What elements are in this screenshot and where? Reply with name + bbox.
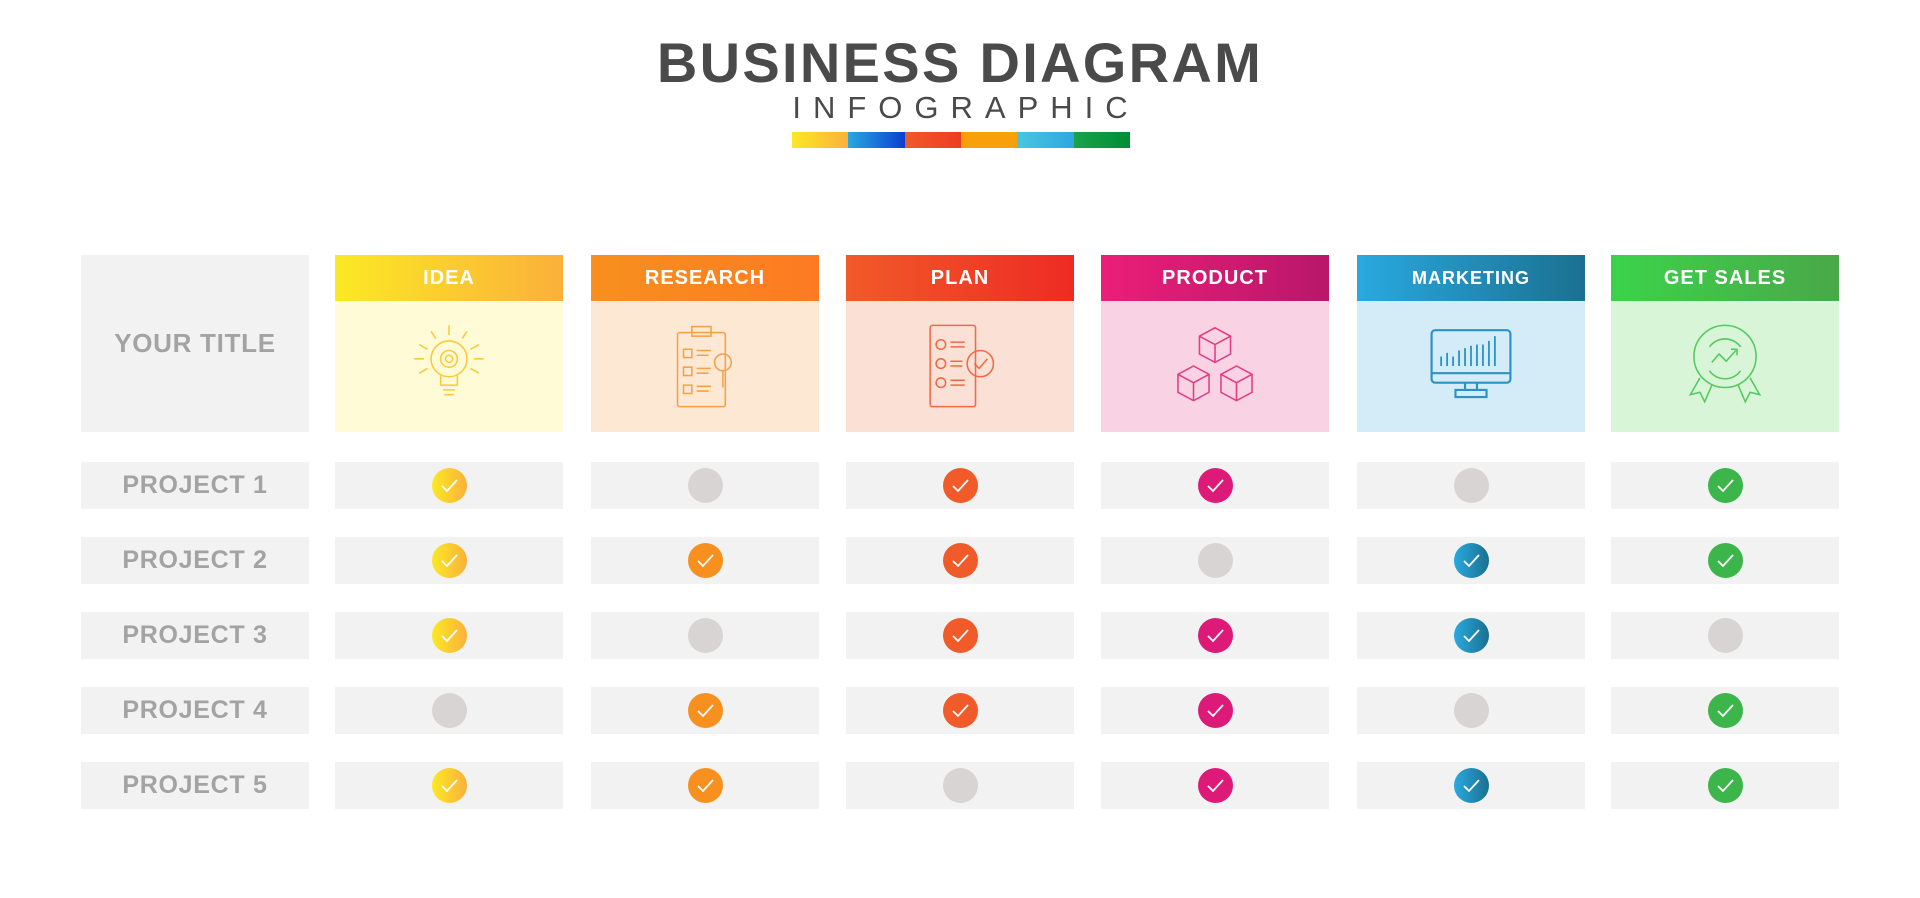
panel: idea: IDEA [423, 267, 475, 289]
title: BUSINESS DIAGRAM [657, 31, 1263, 94]
rows: PROJECT 4 [122, 696, 268, 724]
panel: product [1101, 255, 1329, 432]
icon: monitor [1430, 329, 1512, 398]
panel: research [591, 255, 819, 432]
row labels: PROJECT 1 [122, 471, 268, 499]
your title box [81, 255, 309, 432]
rows: PROJECT 3 [122, 621, 268, 649]
color bar [792, 132, 1130, 148]
icon: checklist [929, 324, 994, 408]
panel: idea [335, 255, 563, 432]
icon: cubes [1177, 326, 1253, 402]
row 1 [335, 462, 563, 509]
row labels [81, 462, 309, 509]
panel: marketing [1357, 255, 1585, 432]
panel: get sales: GET SALES [1664, 267, 1786, 289]
icon: clipboard [676, 326, 732, 408]
row 4 [335, 687, 563, 734]
row 3 [335, 612, 563, 659]
panel: plan [846, 255, 1074, 432]
icon: badge [1688, 324, 1762, 404]
panel: marketing: MARKETING [1412, 268, 1530, 288]
rows: PROJECT 5 [122, 771, 268, 799]
panel: get sales [1611, 255, 1839, 432]
panel: plan: PLAN [931, 267, 989, 289]
subtitle: INFOGRAPHIC [792, 90, 1140, 125]
panel: research: RESEARCH [645, 267, 765, 289]
rows: PROJECT 2 [122, 546, 268, 574]
your title box: YOUR TITLE [114, 328, 276, 358]
row 2 [335, 537, 563, 584]
icon: bulb [414, 325, 484, 396]
panel: product: PRODUCT [1162, 267, 1268, 289]
row 5 [335, 762, 563, 809]
